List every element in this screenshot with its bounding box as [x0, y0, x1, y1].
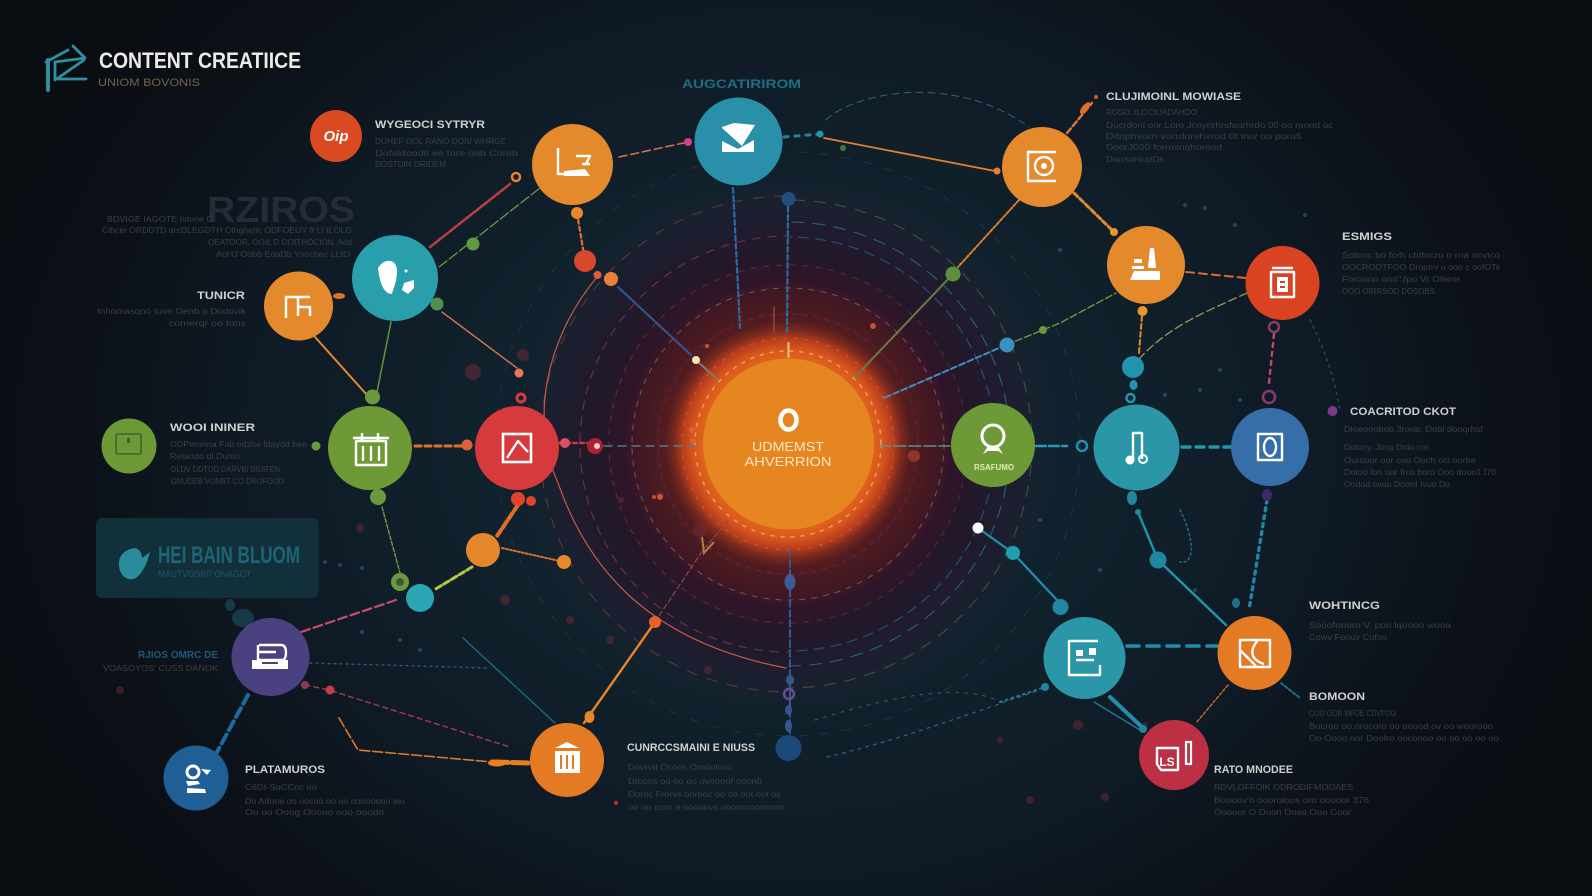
callout tail dots [225, 599, 254, 627]
faint particles [116, 349, 1148, 804]
text block: rato: RDVLOFFOIK ODRODIFMOOAES [1214, 782, 1353, 792]
node: blue top envelope [694, 98, 782, 186]
node: purple laptop [232, 618, 310, 696]
text block: tunicr: Inhomasqno tuve Oenb a Dodovik [97, 306, 247, 316]
text block: clujimoinl [1106, 91, 1334, 164]
node: teal music [1094, 404, 1180, 490]
label: top blue: AUGCATIRIROM [682, 77, 801, 91]
faded heading block: BDVIGE IAGOTE Istone C [107, 214, 213, 224]
callout panel [96, 518, 318, 598]
text block: esmigs: OOO OIRRSOD DOSOBS [1342, 286, 1435, 296]
text block: esmigs: Sotcoc bo fcrh chtfocru o rna ricvico [1342, 250, 1500, 260]
text block: bomoon: BOMOON [1309, 691, 1365, 703]
text block: wooi: ODPerorina Fab odzha fdaydd bee [170, 439, 307, 449]
connectors: right cluster [978, 103, 1340, 730]
text block: cunrccsmaini: Dovrvd Ocoos Ornoolroo [628, 762, 731, 772]
text block: cunrccsmaini: CUNRCCSMAINI E NIUSS [627, 742, 755, 754]
text block: wohtincg: Sooofoooro V. poo lqoooo wooa [1309, 620, 1451, 630]
node: blue person [164, 746, 228, 810]
connector dots [301, 95, 1338, 766]
node: teal globe [352, 235, 438, 321]
small teal node [406, 584, 434, 612]
text block: esmigs: ESMIGS [1342, 231, 1392, 243]
node: olive frame [102, 418, 156, 474]
node: red cabinet [1246, 246, 1320, 320]
central glow [508, 164, 1068, 724]
node: blue camera [1231, 408, 1309, 486]
text block: wooi [170, 422, 307, 486]
connectors: top and centre [619, 92, 1116, 757]
callout panel: MAUTVOSRP ONAGCT [158, 569, 251, 579]
text block: rjios [103, 649, 218, 673]
text block: wygeoci: DOSTDIN DRIDEM [375, 159, 446, 169]
node: green chat: RSAFUMO [974, 463, 1014, 472]
text block: wygeoci: DUHEF OOL RANO DOIV WHRGE [375, 136, 506, 146]
logo icon [46, 46, 86, 90]
text block: bomoon: COO OOR MFOE CDVFOO [1309, 708, 1396, 718]
node: small red badge: Oip [324, 128, 348, 145]
central hub [703, 358, 874, 530]
arrowhead toward hub [702, 537, 714, 553]
node: orange wallet [1218, 616, 1292, 690]
text block: rjios: RJIOS OMRC DE [138, 649, 218, 661]
central hub: AHVERRION [744, 455, 832, 469]
text block: platamuros: PLATAMUROS [245, 764, 325, 776]
text block: clujimoinl: DarrsoniupDs [1106, 154, 1164, 164]
text block: rato: Boooov'o oooroloos oro ooooor 376 [1214, 795, 1369, 805]
text block: platamuros: C6Dt-SoCCoc oo [245, 782, 317, 792]
faded heading block: AoHJ Oobb EoaDb Ysocbec LLtO [216, 249, 350, 259]
text block: tunicr [97, 290, 247, 328]
node: orange grid [264, 272, 333, 340]
node: orange top right spiral [1002, 127, 1082, 207]
text block: tunicr: comerqr oo tuns [169, 318, 246, 328]
text block: tunicr: TUNICR [197, 290, 245, 302]
node: green chat [951, 403, 1035, 487]
text block: esmigs: Foroono ono"Jpo Vr Oferor [1342, 274, 1460, 284]
text block: wooi: DLDV DDTOD DARVBI DIUIFEN [171, 464, 280, 474]
text block: clujimoinl: CLUJIMOINL MOWIASE [1106, 91, 1241, 103]
text block: wohtincg: Cowv Foouv Cofoo [1309, 632, 1387, 642]
small orange node [466, 533, 500, 567]
text block: coacritod: Ourooor oor coo Ooch oci oorbe [1344, 455, 1476, 465]
node: teal document [1044, 617, 1126, 699]
text block: coacritod: Oodod ovoo Doord Ivoo Do [1344, 479, 1450, 489]
text block: coacritod: COACRITOD CKOT [1350, 406, 1456, 418]
node: crimson panels [1139, 720, 1209, 790]
concentric orbit rings [496, 152, 1080, 736]
connectors: left cluster [217, 184, 729, 763]
text block: clujimoinl: DoorJ030 forrnsnqhorood [1106, 142, 1222, 152]
text block: wohtincg [1309, 600, 1451, 642]
node: orange stack [1107, 226, 1185, 304]
text block: wygeoci: Dofaldoodit ee tore oab Coreb [375, 148, 518, 158]
text block: coacritod: Dioeooobob.3roob. Dobl dooqrhsf [1344, 424, 1484, 434]
central hub: UDMEMST [752, 440, 824, 454]
text block: cunrccsmaini: Ooroc Frorvs oorooc oo oo oot oot oc [628, 789, 782, 799]
text block: esmigs [1342, 231, 1500, 296]
text block: coacritod: Dotod foo oor frco boro Ooo dooo1 I70 [1344, 467, 1496, 477]
text block: wygeoci [375, 119, 518, 169]
text block: platamuros: Oo oo Ooog Ooooo ooo ooodo [245, 807, 384, 817]
text block: clujimoinl: Ducrdoni oor Loro Jcoyrirhrsfaorhrdo 00 oo roorid oc [1106, 120, 1334, 130]
title: CONTENT CREATIICE [99, 48, 301, 73]
text block: rato [1214, 764, 1369, 817]
faded heading block [102, 189, 355, 259]
text block: wooi: Retaodo dl Dunto [170, 451, 240, 461]
faded heading block: Cihcte ORDDTD arcDLEGDTH Cthghetic ODFOEUY ft LI tLOLG [102, 225, 352, 235]
text block: esmigs: OOCROOTFOO Droprrv o ooo c oofOTs [1342, 262, 1500, 272]
faded heading block: RZIROS [207, 189, 355, 230]
faded heading block: OEATOOR. OOIL D OOITHOCION. Aod [208, 237, 352, 247]
node: green calendar [328, 406, 412, 490]
text block: clujimoinl: ROSO JLCIOLIADAHDO [1106, 107, 1197, 117]
text block: cunrccsmaini [627, 742, 784, 812]
node: orange top-left cart [532, 124, 613, 205]
node: red chart [475, 406, 559, 490]
text block: platamuros [245, 764, 405, 817]
text block: coacritod: Dotooy. Joop Drdo cor [1344, 442, 1429, 452]
text block: bomoon: Oo Oooo oor DooIro oocoooo oo oo oo oo oo [1309, 733, 1499, 743]
text block: platamuros: Do Adone oo oocoo oo oo oooooooo lao [245, 796, 405, 806]
callout panel: HEI BAIN BLUOM [158, 542, 300, 569]
text block: cunrccsmaini: Dtcoos oo oo oo ovnoonf ooon0 [628, 776, 762, 786]
text block: bomoon [1309, 691, 1499, 743]
teal particles [323, 203, 1307, 652]
text block: bomoon: Bocroo oo.orocoro oo ooood ov oo woorooo [1309, 721, 1493, 731]
text block: rato: RATO MNODEE [1214, 764, 1293, 776]
text block: cunrccsmaini: oo oo coro a ooooovs ooorocoooroon [628, 802, 784, 812]
node: crimson panels: LS [1159, 755, 1175, 769]
text block: clujimoinl: Ditnphvorn vorrdorshxrod 0t irsv oo poru5 [1106, 131, 1302, 141]
text block: rjios: VOASOYOS' CUSS DANOK [103, 663, 218, 673]
text block: wooi: ONUDEB VONRT CO DROFOOD [171, 476, 284, 486]
red dot [614, 801, 618, 805]
node: orange bottom building [530, 723, 604, 797]
text block: wooi: WOOI ININER [170, 422, 255, 434]
text block: coacritod [1344, 406, 1496, 489]
glow sparks [652, 323, 920, 500]
subtitle: UNIOM BOVONIS [98, 77, 200, 89]
text block: wygeoci: WYGEOCI SYTRYR [375, 119, 485, 131]
text block: rato: Ooooor O Doon Doso Ooo Coor [1214, 807, 1351, 817]
node: small red badge [310, 110, 362, 162]
text block: wohtincg: WOHTINCG [1309, 600, 1380, 612]
